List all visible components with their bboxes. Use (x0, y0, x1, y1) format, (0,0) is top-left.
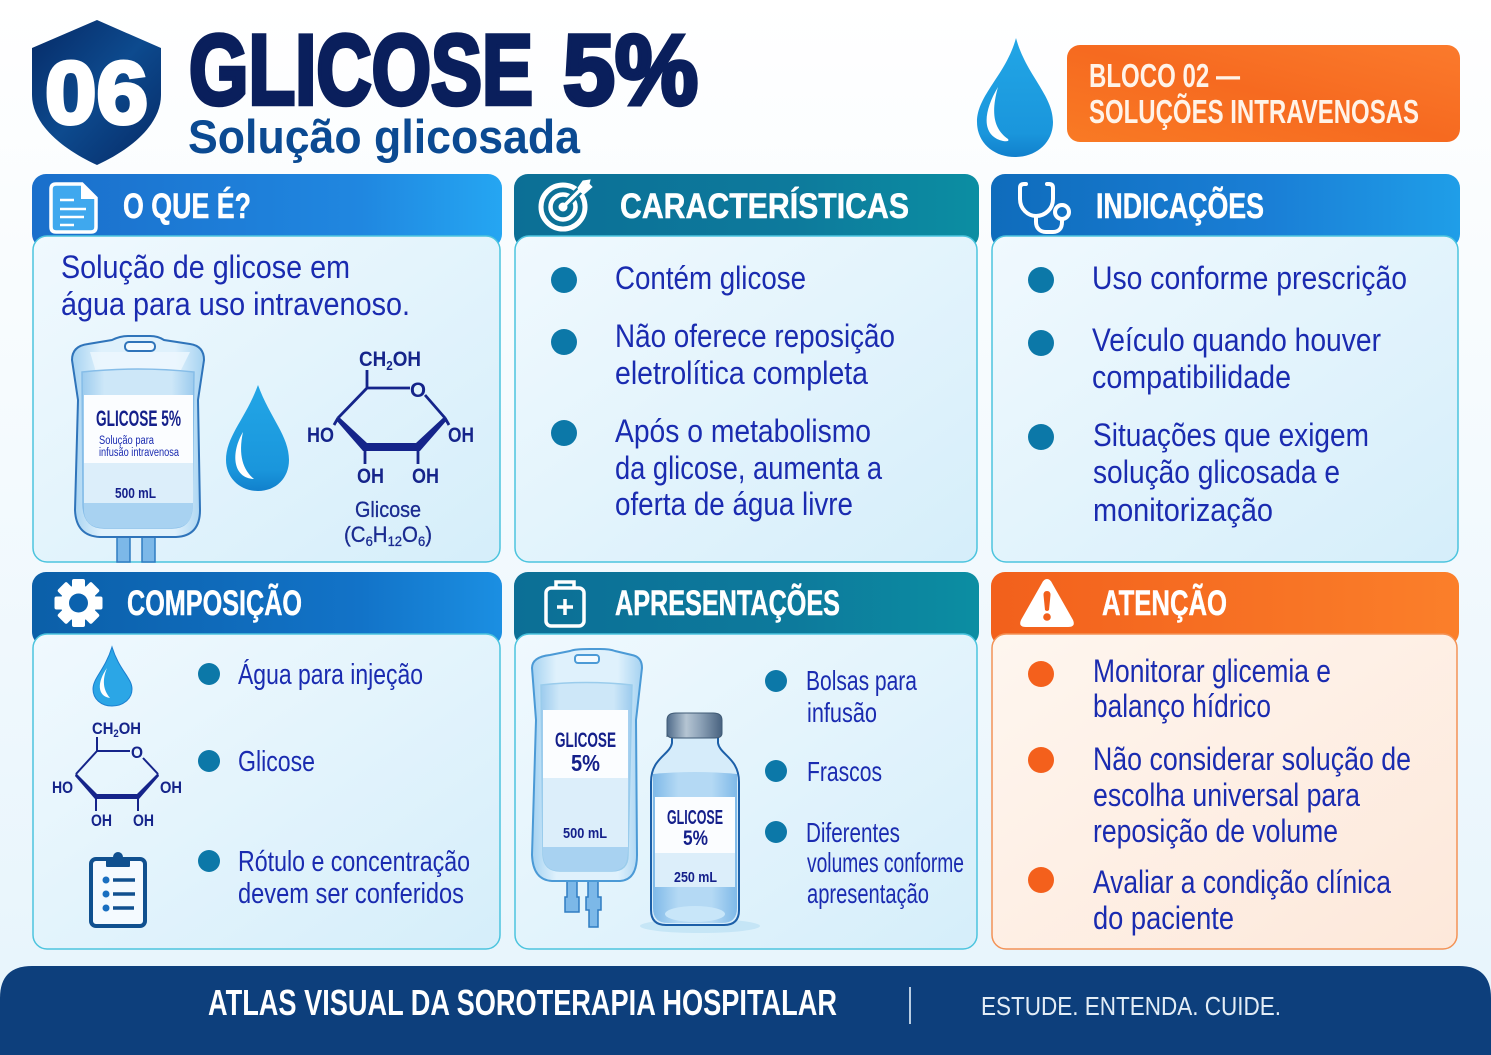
chart: glucose structure: OH (448, 424, 474, 447)
bullet list: devem ser conferidos (238, 878, 464, 910)
bullet list: Uso conforme prescrição (1092, 260, 1407, 296)
panel: atenção (991, 572, 1459, 949)
bullet list: Diferentes (806, 817, 900, 848)
heading: APRESENTAÇÕES (615, 583, 840, 623)
icon: document (51, 184, 96, 232)
bullet list (551, 260, 895, 522)
icon: warning triangle (1020, 579, 1074, 627)
icon: stethoscope (1020, 184, 1069, 232)
icon: water drop (93, 647, 132, 706)
title: 5% (563, 14, 698, 125)
chart: glucose structure: HO (307, 424, 334, 447)
bullet list: volumes conforme (807, 847, 964, 878)
chart: glucose structure: OH (133, 811, 154, 830)
bullet list (198, 658, 470, 910)
illustration: IV bag (72, 336, 204, 562)
bullet list: monitorização (1093, 492, 1273, 528)
bullet list: Monitorar glicemia e (1093, 653, 1331, 689)
chart: glucose structure: O (410, 379, 426, 402)
illustration: glass bottle: 5% (683, 827, 708, 850)
block badge: BLOCO 02 — (1089, 57, 1240, 94)
chart: glucose structure: Glicose (355, 497, 421, 522)
chart: glucose structure: OH (160, 778, 182, 797)
illustration: IV bag (532, 649, 642, 927)
chart: glucose structure: (C (344, 522, 367, 547)
description text: Solução de glicose em (61, 249, 350, 285)
illustration: glass bottle (640, 713, 760, 933)
chart: glucose structure: 2 (113, 728, 119, 740)
bullet list (1028, 653, 1411, 936)
chart: glucose structure: OH (119, 719, 141, 738)
chart: glucose structure: CH (359, 348, 389, 371)
chart: glucose structure: H (373, 522, 388, 547)
bullet list: Rótulo e concentração (238, 846, 470, 878)
description text: água para uso intravenoso. (61, 286, 410, 322)
chart: glucose structure: 2 (386, 358, 393, 373)
chart: glucose structure: CH (92, 719, 117, 738)
footer (0, 966, 1491, 1055)
panel: características (514, 174, 979, 562)
bullet list: oferta de água livre (615, 486, 853, 522)
icon: water drop (977, 38, 1053, 157)
badge: number 06 shield: 06 (45, 43, 148, 142)
chart: glucose structure: 12 (388, 533, 402, 549)
illustration: glass bottle: 250 mL (674, 869, 717, 886)
bullet list: Após o metabolismo (615, 413, 871, 449)
illustration: IV bag: infusão intravenosa (99, 447, 179, 459)
bullet list (765, 665, 964, 909)
chart: glucose structure: ) (425, 522, 432, 547)
icon: gear (54, 579, 102, 627)
bullet list: balanço hídrico (1093, 688, 1271, 724)
icon: target (541, 180, 592, 229)
bullet list: escolha universal para (1093, 777, 1360, 813)
subtitle: Solução glicosada (188, 110, 581, 163)
bullet list: compatibilidade (1092, 359, 1291, 395)
chart: glucose structure: 6 (418, 533, 425, 549)
bullet list: Frascos (807, 756, 882, 787)
panel: indicações (991, 174, 1460, 562)
chart: glucose structure: HO (52, 778, 73, 797)
bullet list (1028, 260, 1407, 528)
bullet list: Não oferece reposição (615, 318, 895, 354)
bullet list: Não considerar solução de (1093, 741, 1411, 777)
panel: apresentações (514, 572, 979, 949)
chart: glucose structure: O (131, 743, 143, 762)
illustration: glass bottle: GLICOSE (667, 807, 723, 829)
bullet list: reposição de volume (1093, 813, 1338, 849)
bullet list: eletrolítica completa (615, 355, 868, 391)
bullet list: Bolsas para (806, 665, 917, 696)
chart: glucose structure: OH (393, 348, 421, 371)
icon: water drop (226, 385, 289, 491)
illustration: IV bag: Solução para (99, 435, 154, 447)
heading: O QUE É? (123, 186, 251, 226)
bullet list: Água para injeção (238, 658, 423, 691)
illustration: IV bag: GLICOSE (555, 729, 616, 752)
footer: ESTUDE. ENTENDA. CUIDE. (981, 991, 1281, 1021)
panel: composição (32, 572, 502, 949)
illustration: IV bag: 500 mL (115, 485, 156, 502)
chart: glucose structure: OH (91, 811, 112, 830)
bullet list: Situações que exigem (1093, 417, 1369, 453)
chart: glucose structure: 6 (366, 533, 373, 549)
bullet list: Glicose (238, 746, 315, 778)
chart: glucose structure: OH (412, 465, 439, 488)
illustration: IV bag: GLICOSE 5% (96, 406, 181, 431)
illustration: IV bag: 5% (571, 750, 600, 776)
chart: glucose structure: O (402, 522, 418, 547)
illustration: IV bag: 500 mL (563, 825, 607, 842)
bullet list: Veículo quando houver (1092, 322, 1381, 358)
bullet list: da glicose, aumenta a (615, 450, 882, 486)
title: GLICOSE (189, 14, 533, 125)
bullet list: infusão (807, 697, 877, 728)
footer: ATLAS VISUAL DA SOROTERAPIA HOSPITALAR (208, 982, 837, 1023)
icon: clipboard (91, 852, 145, 926)
bullet list: Avaliar a condição clínica (1093, 864, 1391, 900)
heading: INDICAÇÕES (1096, 186, 1264, 226)
heading: COMPOSIÇÃO (127, 584, 302, 623)
bullet list: apresentação (807, 878, 929, 909)
chart: glucose structure: OH (357, 465, 384, 488)
chart: glucose structure (307, 348, 474, 549)
icon: medical kit (546, 582, 584, 626)
heading: ATENÇÃO (1102, 584, 1227, 623)
block badge (1067, 45, 1460, 142)
panel: o que é (32, 174, 502, 562)
heading: CARACTERÍSTICAS (620, 186, 909, 226)
chart: glucose structure (52, 719, 182, 830)
bullet list: do paciente (1093, 900, 1234, 936)
bullet list: Contém glicose (615, 260, 806, 296)
badge: number 06 shield (32, 20, 161, 165)
description text (61, 249, 410, 322)
bullet list: solução glicosada e (1093, 454, 1340, 490)
